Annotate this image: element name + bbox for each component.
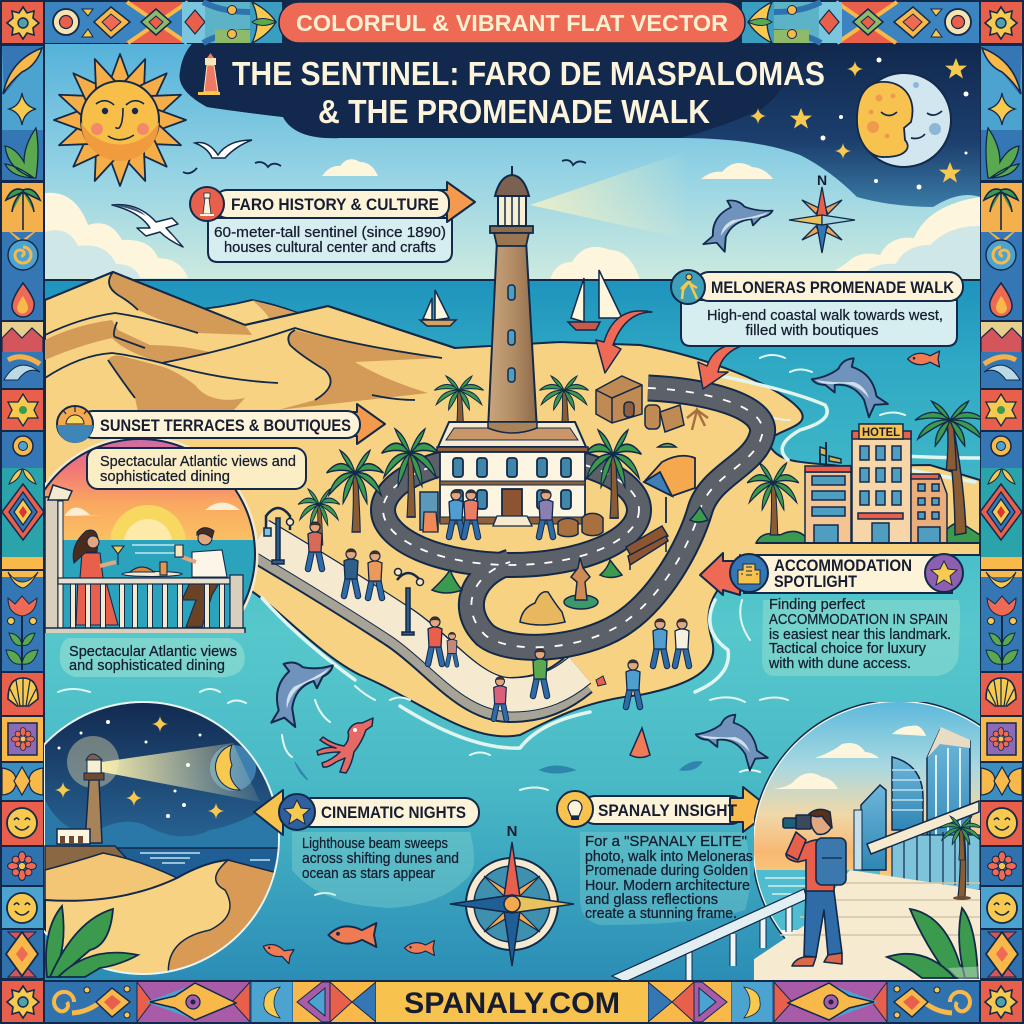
panel: meloneras promenade: High-end coastal walk towards west, bbox=[707, 308, 943, 324]
faro building bbox=[437, 422, 588, 526]
panel: spanaly insight: For a "SPANALY ELITE" bbox=[585, 834, 747, 850]
plant bbox=[887, 908, 978, 978]
promenade walkers bbox=[308, 522, 689, 719]
panel: accommodation spotlight: Tactical choice for luxury bbox=[769, 641, 927, 657]
hotel sign: HOTEL bbox=[862, 427, 900, 439]
dolphins bbox=[251, 358, 888, 770]
panel: sunset terraces heading bbox=[57, 404, 385, 444]
panel: meloneras promenade bbox=[671, 270, 963, 346]
compass rose bottom bbox=[450, 823, 574, 966]
border: top row bbox=[44, 0, 980, 44]
compass rose top right bbox=[789, 172, 855, 253]
border: right column bbox=[980, 0, 1024, 1024]
photographer bbox=[783, 809, 846, 966]
tent umbrella bbox=[644, 456, 695, 523]
panel: faro history: houses cultural center and crafts bbox=[224, 240, 436, 256]
panel: spanaly insight: and glass reflections bbox=[585, 892, 718, 908]
red arrows bbox=[596, 311, 744, 389]
top banner bbox=[279, 2, 745, 43]
sea bbox=[45, 280, 980, 980]
icon: star bbox=[925, 554, 963, 592]
panel: cinematic nights scene bbox=[44, 701, 280, 978]
sailboats bbox=[420, 270, 622, 330]
title: THE SENTINEL: FARO DE MASPALOMAS bbox=[232, 55, 825, 92]
road bbox=[383, 388, 763, 647]
panel: spanaly insight: Promenade during Golden bbox=[585, 863, 748, 879]
panel: accommodation spotlight: ACCOMMODATION bbox=[774, 556, 912, 575]
icon: lighthouse bbox=[190, 187, 224, 221]
bench bbox=[626, 526, 668, 570]
coast foam bbox=[262, 376, 980, 748]
icon: star badge bbox=[279, 794, 315, 830]
panel: faro history bbox=[190, 182, 475, 262]
title lighthouse icon bbox=[198, 53, 220, 95]
icon: sun bbox=[54, 54, 186, 186]
birds bbox=[112, 140, 586, 247]
small waves bbox=[58, 355, 950, 895]
night sky band bbox=[180, 44, 980, 207]
panel: accommodation spotlight bbox=[700, 553, 963, 676]
panel: sunset terraces body bbox=[87, 448, 306, 489]
terrace railing bbox=[45, 485, 245, 635]
footer banner bbox=[376, 982, 648, 1022]
diners bbox=[73, 528, 227, 627]
panel: sunset terraces body: sophisticated dining bbox=[100, 469, 230, 485]
panel: cinematic nights: Lighthouse beam sweeps bbox=[302, 836, 448, 852]
panel: spanaly insight: SPANALY INSIGHT bbox=[598, 801, 738, 820]
dolphin sky bbox=[694, 193, 780, 255]
fish and sea creatures bbox=[261, 351, 940, 964]
panel: sunset terraces body: Spectacular Atlantic views and bbox=[100, 454, 296, 470]
sky bbox=[45, 44, 980, 280]
panel: sunset terraces scene bbox=[45, 439, 258, 633]
plant bbox=[46, 906, 138, 977]
panel: accommodation spotlight: SPOTLIGHT bbox=[774, 572, 858, 591]
compass rose top right: N bbox=[817, 172, 827, 188]
icon: hotel bbox=[730, 554, 768, 592]
panel: spanaly insight: photo, walk into Meloneras bbox=[585, 849, 753, 865]
lighthouse tower bbox=[488, 166, 537, 434]
top banner: COLORFUL & VIBRANT FLAT VECTOR bbox=[296, 10, 728, 36]
sand island and dunes bbox=[45, 272, 980, 736]
footer banner: SPANALY.COM bbox=[404, 987, 620, 1020]
icon: moon bbox=[857, 73, 951, 167]
border: left column bbox=[0, 0, 44, 1024]
lighthouse beam bbox=[530, 150, 690, 240]
panel: faro history: 60-meter-tall sentinel (since 1890) bbox=[214, 225, 446, 241]
panel: accommodation spotlight: is easiest near this landmark. bbox=[769, 627, 951, 643]
promenade walkway bbox=[258, 535, 580, 700]
text blob: dining: and sophisticated dining bbox=[69, 658, 225, 674]
figures at the faro bbox=[420, 490, 603, 537]
border: bottom row bbox=[44, 980, 980, 1024]
panel: photographer scene bbox=[610, 702, 980, 980]
panel: cinematic nights: across shifting dunes and bbox=[302, 851, 459, 867]
icon: sunset bbox=[57, 406, 93, 443]
clouds bbox=[45, 159, 980, 280]
text blob: dining bbox=[60, 638, 245, 678]
panel: accommodation spotlight: ACCOMMODATION IN SPAIN bbox=[769, 612, 948, 628]
panel: cinematic nights: ocean as stars appear bbox=[302, 866, 435, 882]
panel: spanaly insight: Hour. Modern architecture bbox=[585, 878, 750, 894]
sculpture garden bbox=[432, 507, 708, 625]
panel: spanaly insight: create a stunning frame. bbox=[585, 906, 737, 922]
hotel group bbox=[747, 401, 985, 543]
watermark bbox=[948, 966, 990, 988]
panel: meloneras promenade: filled with boutiques bbox=[746, 323, 878, 339]
panel: cinematic nights: CINEMATIC NIGHTS bbox=[321, 803, 466, 822]
compass rose bottom: N bbox=[507, 823, 517, 840]
panel: accommodation spotlight: Finding perfect bbox=[769, 597, 865, 613]
stars bbox=[750, 58, 968, 190]
icon: walker bbox=[671, 270, 705, 304]
panel: spanaly insight bbox=[557, 787, 772, 925]
panel: faro history: FARO HISTORY & CULTURE bbox=[231, 195, 439, 214]
panel: meloneras promenade: MELONERAS PROMENADE WALK bbox=[711, 278, 955, 297]
icon: light bulb bbox=[557, 791, 593, 827]
panel: cinematic nights bbox=[254, 790, 479, 908]
railing bbox=[612, 889, 807, 982]
lamp posts bbox=[264, 508, 424, 635]
panel: sunset terraces heading: SUNSET TERRACES & BOUTIQUES bbox=[100, 416, 351, 435]
text blob: dining: Spectacular Atlantic views bbox=[69, 644, 237, 660]
palm trees around faro bbox=[298, 376, 642, 545]
title: & THE PROMENADE WALK bbox=[318, 93, 710, 130]
panel: accommodation spotlight: with with dune access. bbox=[768, 656, 911, 672]
title bbox=[232, 55, 825, 130]
hut and crates bbox=[596, 376, 708, 447]
